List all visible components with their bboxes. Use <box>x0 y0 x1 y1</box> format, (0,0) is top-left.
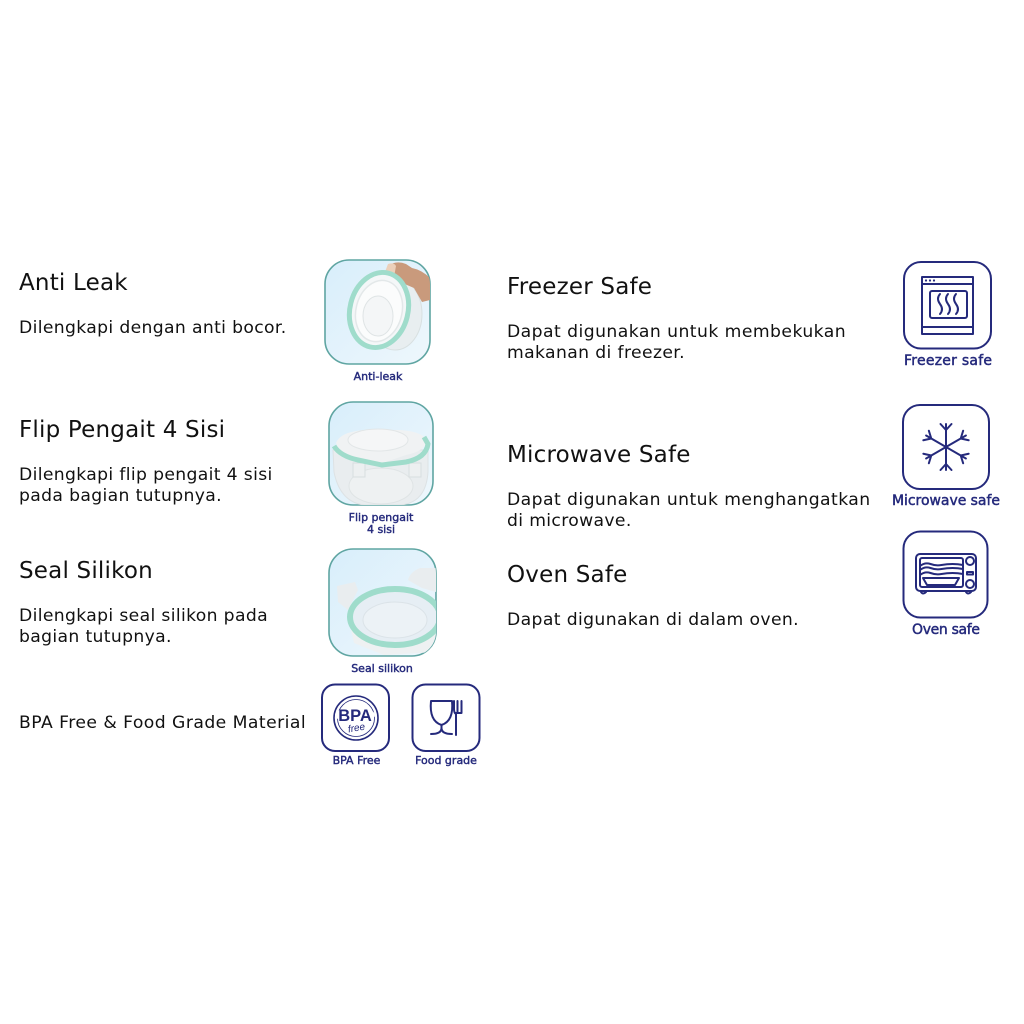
text: Oven Safe description: Dapat digunakan di dalam oven. <box>507 610 799 630</box>
caption: Microwave safe: Microwave safe <box>892 493 1000 509</box>
caption: Freezer safe: Freezer safe <box>904 353 992 369</box>
text: Seal Silikon description: bagian tutupnya. <box>19 627 172 647</box>
icon: oven with heat waves <box>904 262 991 348</box>
text: Seal Silikon description <box>19 606 268 647</box>
text: Microwave Safe description <box>507 490 870 531</box>
heading: Microwave Safe: Microwave Safe <box>507 442 691 468</box>
caption: Flip pengait 4 sisi: 4 sisi <box>367 523 395 536</box>
heading: Oven Safe: Oven Safe <box>507 562 628 588</box>
text: Freezer Safe description <box>507 322 846 363</box>
text: Flip Pengait description: Dilengkapi flip pengait 4 sisi <box>19 465 273 485</box>
text: Microwave Safe description: di microwave. <box>507 511 632 531</box>
caption: Flip pengait 4 sisi <box>349 511 414 536</box>
caption: Anti-leak: Anti-leak <box>354 370 403 383</box>
text: Flip Pengait description <box>19 465 273 506</box>
heading: Flip Pengait 4 Sisi: Flip Pengait 4 Sisi <box>19 417 225 443</box>
panel: anti-leak photo <box>325 260 430 364</box>
text: Seal Silikon description: Dilengkapi seal silikon pada <box>19 606 268 626</box>
text: Freezer Safe description: makanan di freezer. <box>507 343 685 363</box>
heading: Anti Leak: Anti Leak <box>19 270 128 296</box>
caption: Flip pengait 4 sisi: Flip pengait <box>349 511 414 524</box>
text: Flip Pengait description: pada bagian tutupnya. <box>19 486 222 506</box>
caption: Food grade: Food grade <box>415 754 477 767</box>
icon: toaster oven <box>904 532 988 618</box>
text: BPA Free and Food Grade: BPA Free & Food Grade Material <box>19 713 306 733</box>
text: Freezer Safe description: Dapat digunakan untuk membekukan <box>507 322 846 342</box>
heading: Seal Silikon: Seal Silikon <box>19 558 153 584</box>
caption: BPA Free: BPA Free <box>333 754 381 767</box>
icon: BPA free badge: free <box>347 722 366 735</box>
icon: BPA free badge: BPA <box>338 707 372 725</box>
icon: snowflake <box>903 405 989 489</box>
icon: BPA free badge <box>322 684 389 751</box>
caption: Seal silikon: Seal silikon <box>351 662 413 675</box>
text: Anti Leak description: Dilengkapi dengan anti bocor. <box>19 318 287 338</box>
heading: Freezer Safe: Freezer Safe <box>507 274 652 300</box>
text: Microwave Safe description: Dapat digunakan untuk menghangatkan <box>507 490 870 510</box>
panel: flip lock photo <box>329 402 433 505</box>
panel: silicone seal photo <box>329 549 440 656</box>
icon: food grade <box>412 684 480 751</box>
caption: Oven safe: Oven safe <box>912 622 980 638</box>
